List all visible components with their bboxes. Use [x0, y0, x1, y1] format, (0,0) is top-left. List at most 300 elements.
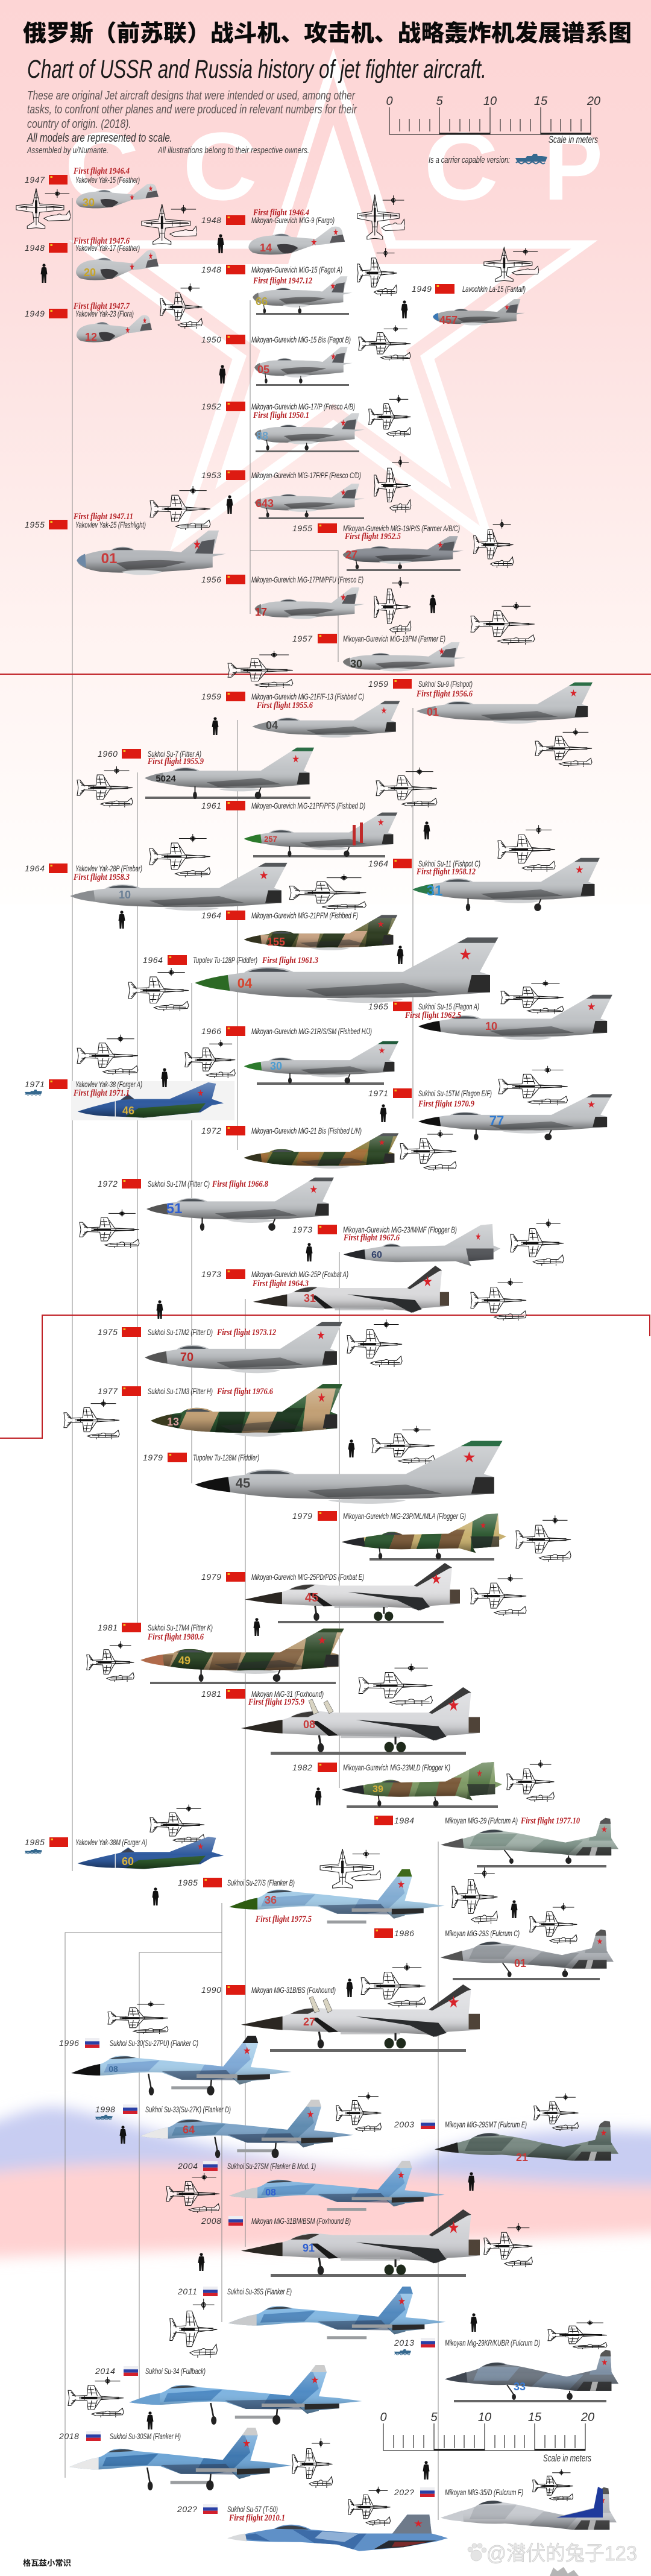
label: 1952 MiG-17/P: First flight 1950.1	[253, 411, 309, 420]
label: 1975 Su-17M2: 1975	[98, 1327, 118, 1337]
title: Chinese heading: 俄罗斯（前苏联）战斗机、攻击机、战略轰炸机发展谱系图	[23, 21, 632, 46]
aircraft: Su-15: 10	[485, 1020, 497, 1032]
blueprint: MiG-9	[357, 195, 405, 239]
aircraft: Yak-15	[76, 184, 159, 209]
label: 1956 MiG-17PM/PFU	[201, 575, 363, 584]
aircraft: MiG-35	[441, 2487, 617, 2539]
label: 1955 MiG-19/P/S: 1955	[292, 523, 313, 533]
label: 1955 Yak-25: First flight 1947.11	[73, 512, 133, 522]
aircraft: MiG-23MLD: 39	[373, 1784, 383, 1795]
label: 1950 MiG-15 Bis: 1950	[201, 335, 222, 344]
label: 1965 Su-15	[368, 1002, 479, 1020]
blueprint: MiG-23	[511, 1219, 564, 1266]
label: 2004 Su-27SM: Sukhoi Su-27SM (Flanker B Mod. 1)	[227, 2161, 316, 2171]
aircraft: MiG-25PD	[245, 1563, 460, 1621]
aircraft: MiG-23M	[344, 1224, 500, 1273]
aircraft: MiG-21F	[253, 700, 400, 744]
label: 1948 MiG-9: Mikoyan-Gurevich MiG-9 (Fargo)	[251, 215, 335, 225]
label: 1949 Yak-23: Yakovlev Yak-23 (Flora)	[75, 309, 134, 318]
scale bar: bottom	[380, 2411, 594, 2464]
blueprint: Su-17M	[80, 1210, 139, 1248]
label: 1955 Yak-25	[25, 512, 146, 529]
blueprint: MiG-21bis	[400, 1130, 456, 1171]
blueprint: MiG-17	[369, 395, 411, 437]
label: 1990 MiG-31B/BS: Mikoyan MiG-31B/BS (Foxhound)	[251, 1985, 336, 1995]
label: 1973 MiG-25P: 1973	[201, 1269, 222, 1279]
label: 1985 Su-27/S: First flight 1977.5	[255, 1915, 312, 1924]
divider lines: Soviet/Russian eras	[0, 674, 651, 1438]
label: 1979 MiG-25PD/PDS	[201, 1572, 364, 1582]
label: 1959 MiG-21F/F-13: 1959	[201, 692, 222, 701]
aircraft: Yak-25: 01	[101, 551, 117, 567]
aircraft: Tu-128M	[195, 1439, 503, 1515]
blueprint: Su-15	[501, 980, 564, 1014]
scale bar: top	[386, 95, 600, 145]
corner fragment	[550, 2567, 579, 2576]
aircraft: Su-7	[145, 747, 314, 799]
label: 1996 Su-30	[59, 2038, 198, 2048]
label: 1973 MiG-23/M/MF: First flight 1967.6	[343, 1233, 400, 1243]
blueprint: MiG-19PM	[471, 602, 535, 645]
aircraft: MiG-29SMT	[435, 2120, 618, 2170]
scale bar: top: 0	[386, 95, 393, 108]
blueprint: Yak-15	[16, 188, 71, 229]
label: 1960 Su-7: Sukhoi Su-7 (Fitter A)	[148, 749, 201, 759]
label: 2011 Su-35S	[177, 2287, 292, 2296]
text block: introduction: All models are represented to scale.	[27, 131, 172, 145]
aircraft: Su-17M3: 13	[167, 1416, 179, 1428]
blueprint: Su-33	[336, 2092, 381, 2132]
aircraft: MiG-25P: 31	[304, 1292, 316, 1304]
label: 1964 Yak-28P: 1964	[25, 863, 45, 873]
label: 1966 MiG-21R/S/SM	[201, 1026, 372, 1036]
aircraft: MiG-31BM/BSM: 91	[303, 2242, 315, 2254]
label: 1998 Su-33	[95, 2104, 231, 2120]
label: 1984 MiG-29: First flight 1977.10	[520, 1816, 580, 1826]
label: 1985 Su-27/S	[178, 1878, 312, 1924]
aircraft: MiG-29S	[441, 1929, 614, 1977]
label: 1981 Su-17M4: First flight 1980.6	[147, 1632, 204, 1642]
label: 2018 Su-30SM: 2018	[58, 2431, 80, 2441]
blueprint: MiG-35	[533, 2469, 573, 2501]
label: 1948 MiG-15	[201, 265, 342, 286]
aircraft: Su-27/S: 36	[265, 1894, 277, 1906]
label: 1973 MiG-25P: Mikoyan-Gurevich MiG-25P (Foxbat A)	[251, 1269, 348, 1279]
emblem: CCCP star background: C	[64, 112, 139, 220]
label: 1982 MiG-23MLD: 1982	[292, 1763, 313, 1772]
aircraft: Yak-38	[78, 1082, 224, 1118]
label: 1979 MiG-25PD/PDS: 1979	[201, 1572, 222, 1582]
scale bar: bottom: 20	[580, 2411, 594, 2424]
aircraft: Su-30	[71, 2036, 292, 2095]
blueprint: MiG-21PF	[376, 768, 437, 807]
label: 2014 Su-34: Sukhoi Su-34 (Fullback)	[145, 2366, 206, 2376]
aircraft: MiG-29S: 01	[514, 1957, 526, 1969]
blueprint: Su-30SM	[292, 2438, 333, 2488]
label: 1975 Su-17M2: Sukhoi Su-17M2 (Fitter D)	[148, 1327, 213, 1337]
label: 1964 Yak-28P	[25, 863, 142, 882]
blueprint: Su-27SM	[166, 2173, 219, 2213]
aircraft: Su-7: 5024	[156, 774, 176, 784]
emblem: CCCP star background: C	[424, 112, 498, 220]
label: 1975 Su-17M2: First flight 1973.12	[216, 1328, 276, 1337]
aircraft: MiG-31B/BS: 27	[303, 2016, 315, 2028]
label: 1966 MiG-21R/S/SM: Mikoyan-Gurevich MiG-21R/S/SM (Fishbed H/J)	[251, 1026, 372, 1036]
blueprint: MiG-17F	[374, 456, 411, 513]
aircraft: Yak-28P	[70, 862, 288, 919]
label: 1947 Yak-15: 1947	[25, 175, 45, 185]
label: 1947 Yak-15: Yakovlev Yak-15 (Feather)	[75, 175, 140, 185]
label: 1957 MiG-19PM: Mikoyan-Gurevich MiG-19PM (Farmer E)	[343, 634, 445, 643]
label: 1985 Yak-38M: Yakovlev Yak-38M (Forger A)	[75, 1837, 147, 1847]
label: 1964 Su-11: First flight 1958.12	[416, 867, 476, 877]
label: 1973 MiG-25P	[201, 1269, 348, 1289]
label: 2004 Su-27SM: 2004	[177, 2161, 198, 2171]
label: 1979 MiG-23P/ML/MLA: 1979	[292, 1511, 313, 1521]
blueprint: Su-17M4	[87, 1641, 134, 1682]
blueprint: MiG-21F	[228, 651, 293, 688]
blueprint: Yak-23	[160, 283, 203, 329]
aircraft: Yak-38: 46	[122, 1105, 134, 1117]
label: 1971 Yak-38: Yakovlev Yak-38 (Forger A)	[75, 1079, 142, 1089]
blueprint: MiG-15	[357, 248, 397, 296]
label: 1973 MiG-25P: First flight 1964.3	[252, 1279, 309, 1289]
label: 1998 Su-33: Sukhoi Su-33(Su-27K) (Flanker D)	[145, 2104, 231, 2114]
aircraft: Su-17M3	[151, 1383, 342, 1446]
label: 2022 MiG-35: Mikoyan MiG-35/D (Fulcrum F)	[445, 2487, 523, 2497]
label: 1953 MiG-17F/PF	[201, 470, 361, 480]
aircraft: Su-33: 64	[183, 2124, 195, 2136]
aircraft: Su-17M	[146, 1176, 334, 1231]
text block: introduction	[27, 89, 357, 156]
blueprint: MiG-29S	[530, 1903, 577, 1944]
label: 1984 MiG-29	[374, 1816, 580, 1826]
label: 2014 Su-34: 2014	[95, 2366, 116, 2376]
blueprint: MiG-29SMT	[534, 2094, 578, 2131]
aircraft: Su-30: 08	[108, 2064, 118, 2074]
scale bar: bottom: 5	[430, 2411, 438, 2424]
blueprint: MiG-23ML	[516, 1515, 571, 1562]
label: 1952 MiG-17/P: 1952	[201, 402, 222, 411]
aircraft: MiG-15 Bis	[254, 347, 352, 384]
blueprint: MiG-25P	[471, 1278, 526, 1321]
aircraft: Yak-23: 12	[85, 331, 97, 343]
label: 1964 MiG-21PFM: 1964	[201, 911, 222, 920]
label: 1957 MiG-19PM	[292, 634, 445, 643]
label: 2013 MiG-29KR/KUBR: Mikoyan Mig-29KR/KUBR (Fulcrum D)	[445, 2338, 540, 2347]
aircraft: MiG-19PM: 30	[350, 658, 362, 670]
label: 1955 MiG-19/P/S: Mikoyan-Gurevich MiG-19/P/S (Farmer A/B/C)	[343, 523, 460, 533]
label: 1955 Yak-25: 1955	[25, 520, 45, 529]
label: 1971 Yak-38: 1971	[25, 1079, 45, 1089]
watermark: source credit: @潜伏的兔子123	[486, 2542, 637, 2565]
label: 1953 MiG-17F/PF: 1953	[201, 470, 222, 480]
aircraft: Tu-128M: 45	[236, 1476, 250, 1491]
aircraft: La-15	[433, 299, 525, 330]
aircraft: MiG-29	[441, 1817, 618, 1864]
text block: introduction: country of origin. (2018).	[27, 118, 131, 131]
label: 1986 MiG-29S: Mikoyan MiG-29S (Fulcrum C)	[445, 1928, 520, 1938]
label: 1947 Yak-15	[25, 166, 140, 185]
label: 1948 MiG-15: Mikoyan-Gurevich MiG-15 (Fagot A)	[251, 265, 342, 274]
label: 2022 MiG-35	[394, 2487, 523, 2497]
aircraft: MiG-23P/ML/MLA	[342, 1514, 506, 1559]
aircraft: Su-17M4: 49	[178, 1655, 190, 1667]
aircraft: MiG-21PF: 257	[264, 835, 277, 844]
label: 1985 Su-27/S: 1985	[178, 1878, 198, 1887]
aircraft: MiG-17	[255, 413, 365, 450]
label: 1949 Yak-23	[25, 301, 134, 318]
aircraft: MiG-19PM	[343, 642, 465, 677]
label: 1948 Yak-17: First flight 1947.6	[73, 236, 130, 246]
label: 1984 MiG-29: 1984	[394, 1816, 415, 1825]
aircraft: MiG-25P	[253, 1266, 449, 1323]
label: 1959 MiG-21F/F-13	[201, 692, 364, 710]
blueprint: Yak-38M	[150, 1805, 204, 1843]
aircraft: Yak-17	[76, 250, 159, 280]
label: 1981 MiG-31: First flight 1975.9	[248, 1697, 304, 1707]
label: 1984 MiG-29: Mikoyan MiG-29 (Fulcrum A)	[445, 1816, 518, 1825]
label: 1953 MiG-17F/PF: Mikoyan-Gurevich MiG-17F/PF (Fresco C/D)	[251, 470, 361, 480]
label: 1981 Su-17M4: Sukhoi Su-17M4 (Fitter K)	[148, 1623, 213, 1632]
scale bar: bottom: 10	[478, 2411, 491, 2424]
legend: carrier capable: Is a carrier capable version:	[429, 155, 510, 165]
aircraft: Su-35S	[228, 2287, 446, 2345]
blueprint: Yak-28	[149, 834, 210, 877]
aircraft: MiG-19	[343, 536, 464, 569]
blueprint: MiG-21R	[185, 1040, 235, 1078]
label: 1972 MiG-21 Bis	[201, 1126, 362, 1135]
blueprint: MiG-31B	[361, 1963, 426, 2007]
aircraft: Tu-128P	[195, 936, 498, 1014]
blueprint: Su-30	[108, 2001, 168, 2034]
blueprint: Su-7	[77, 766, 133, 807]
blueprint: Tu-128M	[372, 1426, 435, 1464]
blueprint: Su-27	[320, 1849, 381, 1888]
blueprint: MiG-31BM	[484, 2223, 532, 2267]
label: 1964 Yak-28P: Yakovlev Yak-28P (Firebar)	[75, 863, 142, 873]
text block: introduction: tasks, to confront other planes and were produced in relevant numbers for their	[27, 103, 357, 116]
label: 1964 Yak-28P: First flight 1958.3	[73, 873, 130, 882]
aircraft: Su-9	[417, 681, 593, 731]
aircraft: MiG-17PM: 17	[255, 606, 267, 618]
aircraft: Su-27SM: 08	[265, 2188, 276, 2198]
label: 1972 Su-17M: First flight 1966.8	[212, 1179, 268, 1189]
label: 1960 Su-7	[98, 749, 204, 766]
label: 1982 MiG-23MLD: Mikoyan-Gurevich MiG-23MLD (Flogger K)	[343, 1763, 450, 1772]
label: 1950 MiG-15 Bis: Mikoyan-Gurevich MiG-15 Bis (Fagot B)	[251, 335, 351, 344]
label: 1986 MiG-29S: 1986	[394, 1928, 415, 1938]
blueprint: MiG-21PFM	[289, 874, 366, 910]
scale bar: top: 20	[587, 95, 600, 108]
label: 1959 Su-9	[368, 679, 473, 699]
aircraft: MiG-25PD: 45	[305, 1591, 318, 1605]
aircraft: Su-15	[418, 994, 612, 1048]
label: 1959 Su-9: First flight 1956.6	[416, 689, 473, 699]
aircraft: MiG-17: 88	[256, 430, 268, 442]
aircraft: Su-11: 31	[427, 883, 442, 899]
label: 1949 La-15	[412, 284, 526, 294]
aircraft: MiG-29KR/KUBR	[445, 2349, 618, 2400]
label: 1990 MiG-31B/BS	[201, 1985, 336, 1995]
label: 1966 MiG-21R/S/SM: 1966	[201, 1026, 222, 1036]
aircraft: Yak-28P: 10	[119, 889, 131, 901]
label: 1964 Tu-128P	[143, 955, 318, 965]
blueprint: MiG-23MLD	[507, 1760, 554, 1802]
label: 1959 Su-9: 1959	[368, 679, 389, 689]
label: 1948 MiG-15: First flight 1947.12	[253, 276, 312, 286]
label: 1948 Yak-17: Yakovlev Yak-17 (Feather)	[75, 243, 140, 253]
label: 2014 Su-34	[95, 2366, 206, 2376]
label: 2022 Su-57: Sukhoi Su-57 (T-50)	[227, 2504, 278, 2514]
aircraft: La-15: 457	[439, 314, 458, 326]
aircraft: MiG-15	[253, 276, 352, 314]
label: 1982 MiG-23MLD	[292, 1763, 450, 1772]
aircraft: Su-15TM: 77	[489, 1113, 504, 1128]
label: 1949 Yak-23: 1949	[25, 309, 45, 318]
lineage lines	[65, 198, 438, 2520]
label: 1965 Su-15: 1965	[368, 1002, 389, 1011]
aircraft: MiG-31B/BS	[241, 1984, 480, 2048]
label: 1973 MiG-23/M/MF	[292, 1225, 457, 1243]
label: 2022 Su-57: 202?	[177, 2504, 198, 2514]
label: 1952 MiG-17/P	[201, 402, 355, 420]
blueprint: Yak-17	[142, 204, 197, 244]
label: 1972 Su-17M	[98, 1179, 268, 1189]
label: 1956 MiG-17PM/PFU: 1956	[201, 575, 222, 584]
aircraft: MiG-17PM	[255, 587, 365, 625]
aircraft: MiG-15: 66	[256, 295, 268, 308]
scale bar: top: 5	[436, 95, 443, 108]
label: 1948 MiG-15: 1948	[201, 265, 222, 274]
label: 1971 Su-15TM	[368, 1088, 492, 1109]
aircraft: MiG-17F	[255, 484, 365, 517]
label: 1979 Tu-128M: Tupolev Tu-128M (Fiddler)	[193, 1453, 259, 1462]
label: 1949 La-15: 1949	[412, 284, 432, 294]
aircraft: MiG-29SMT: 21	[516, 2151, 528, 2164]
label: 1972 MiG-21 Bis: 1972	[201, 1126, 222, 1135]
blueprint: MiG-29KR	[548, 2320, 607, 2349]
label: 2008 MiG-31BM/BSM	[201, 2216, 351, 2226]
aircraft: Yak-38M	[78, 1837, 224, 1869]
aircraft: MiG-21 Bis	[244, 1132, 398, 1175]
label: 2008 MiG-31BM/BSM: Mikoyan MiG-31BM/BSM (Foxhound B)	[251, 2216, 351, 2226]
text block: introduction: These are original Jet aircraft designs that were intended or used, among other	[27, 89, 356, 103]
aircraft: MiG-9: 14	[260, 242, 272, 254]
label: 2018 Su-30SM: Sukhoi Su-30SM (Flanker H)	[110, 2431, 181, 2441]
label: 1959 MiG-21F/F-13: Mikoyan-Gurevich MiG-21F/F-13 (Fishbed C)	[251, 692, 364, 701]
aircraft: MiG-21PFM: 155	[267, 936, 285, 948]
aircraft: MiG-31: 08	[303, 1719, 315, 1731]
blueprint: La-15	[484, 247, 539, 282]
aircraft: Yak-15: 30	[83, 197, 95, 209]
aircraft: Su-34	[129, 2365, 362, 2425]
label: 1955 MiG-19/P/S	[292, 523, 460, 541]
blueprint: Su-9	[535, 728, 592, 767]
aircraft: Su-17M2: 70	[180, 1351, 193, 1364]
label: 1975 Su-17M2	[98, 1327, 276, 1337]
aircraft: MiG-19: 27	[345, 549, 357, 561]
label: 1959 MiG-21F/F-13: First flight 1955.6	[256, 701, 313, 710]
label: 1964 Su-11: Sukhoi Su-11 (Fishpot C)	[418, 859, 480, 868]
scale bar: bottom: Scale in meters	[543, 2452, 591, 2464]
scale bar: bottom: 15	[528, 2411, 542, 2424]
label: 1948 MiG-9	[201, 208, 335, 225]
label: 2008 MiG-31BM/BSM: 2008	[201, 2216, 222, 2226]
label: 1985 Yak-38M	[25, 1837, 147, 1854]
blueprint: Su-17M3	[64, 1400, 119, 1439]
aircraft: Su-17M: 51	[166, 1201, 182, 1217]
aircraft: MiG-31	[241, 1687, 480, 1752]
blueprint: MiG-19	[474, 519, 514, 568]
ground bars under aircraft	[145, 313, 606, 2402]
label: 1971 Yak-38	[25, 1079, 142, 1098]
aircraft: MiG-21PF	[244, 812, 397, 857]
aircraft: Su-27SM	[229, 2161, 445, 2217]
label: 1971 Su-15TM: 1971	[368, 1088, 389, 1098]
label: 1950 MiG-15 Bis	[201, 335, 351, 344]
label: 1961 MiG-21PF/PFS: 1961	[201, 801, 222, 810]
label: 1979 Tu-128M	[143, 1453, 259, 1462]
aircraft: Yak-38M: 60	[122, 1855, 134, 1867]
label: 1965 Su-15: First flight 1962.5	[404, 1011, 461, 1020]
blueprint: MiG-15 Bis	[359, 325, 410, 361]
icons: pilot silhouettes for scale	[41, 234, 517, 2480]
label: 1973 MiG-23/M/MF: Mikoyan-Gurevich MiG-23/M/MF (Flogger B)	[343, 1225, 457, 1234]
label: 2022 Su-57	[177, 2504, 285, 2523]
aircraft: Su-30SM	[69, 2428, 292, 2490]
label: 2011 Su-35S: 2011	[177, 2287, 198, 2296]
label: 1996 Su-30: Sukhoi Su-30(Su-27PU) (Flanker C)	[110, 2038, 198, 2048]
label: 1977 Su-17M3: 1977	[98, 1386, 118, 1396]
blueprint: MiG-31	[359, 1664, 432, 1706]
aircraft: Yak-23	[77, 315, 152, 343]
label: 1990 MiG-31B/BS: 1990	[201, 1985, 222, 1995]
label: 2013 MiG-29KR/KUBR: 2013	[394, 2338, 415, 2347]
label: 1961 MiG-21PF/PFS: Mikoyan-Gurevich MiG-21PF/PFS (Fishbed D)	[251, 801, 365, 810]
label: 1964 Su-11	[368, 859, 480, 877]
label: 1964 Tu-128P: 1964	[143, 955, 163, 965]
label: 2018 Su-30SM	[58, 2431, 181, 2441]
label: 1981 MiG-31	[201, 1689, 324, 1707]
label: 1965 Su-15: Sukhoi Su-15 (Flagon A)	[418, 1002, 479, 1011]
label: 2003 MiG-29SMT	[394, 2120, 527, 2129]
blueprint: Yak-38	[77, 1035, 138, 1075]
aircraft: MiG-15 Bis: 05	[257, 364, 269, 376]
label: 1960 Su-7: 1960	[98, 749, 118, 759]
label: 1981 MiG-31: 1981	[201, 1689, 222, 1699]
label: 1955 MiG-19/P/S: First flight 1952.5	[344, 532, 401, 541]
label: 1979 MiG-23P/ML/MLA	[292, 1511, 466, 1521]
label: 1979 Tu-128M: 1979	[143, 1453, 163, 1462]
emblem: CCCP star background: C	[183, 112, 257, 220]
panel: Yak-38 backdrop	[71, 1081, 234, 1120]
label: 1971 Su-15TM: First flight 1970.9	[418, 1099, 474, 1109]
background: Russian tricolour waves	[0, 2107, 651, 2258]
blueprint: Su-17M2	[347, 1319, 402, 1367]
scale bar: top: 15	[534, 95, 548, 108]
emblem: CCCP star background: P	[544, 112, 603, 220]
background gradient	[0, 0, 651, 904]
label: 1948 MiG-9: First flight 1946.4	[253, 208, 309, 218]
footer: author tag: 格瓦兹小常识	[23, 2559, 71, 2568]
aircraft: Su-9: 01	[427, 706, 439, 718]
label: 1948 MiG-9: 1948	[201, 215, 222, 225]
aircraft: Su-15TM	[418, 1093, 612, 1140]
label: 1952 MiG-17/P: Mikoyan-Gurevich MiG-17/P (Fresco A/B)	[251, 402, 355, 411]
aircraft: Yak-25	[77, 531, 226, 584]
label: 2004 Su-27SM	[177, 2161, 316, 2171]
